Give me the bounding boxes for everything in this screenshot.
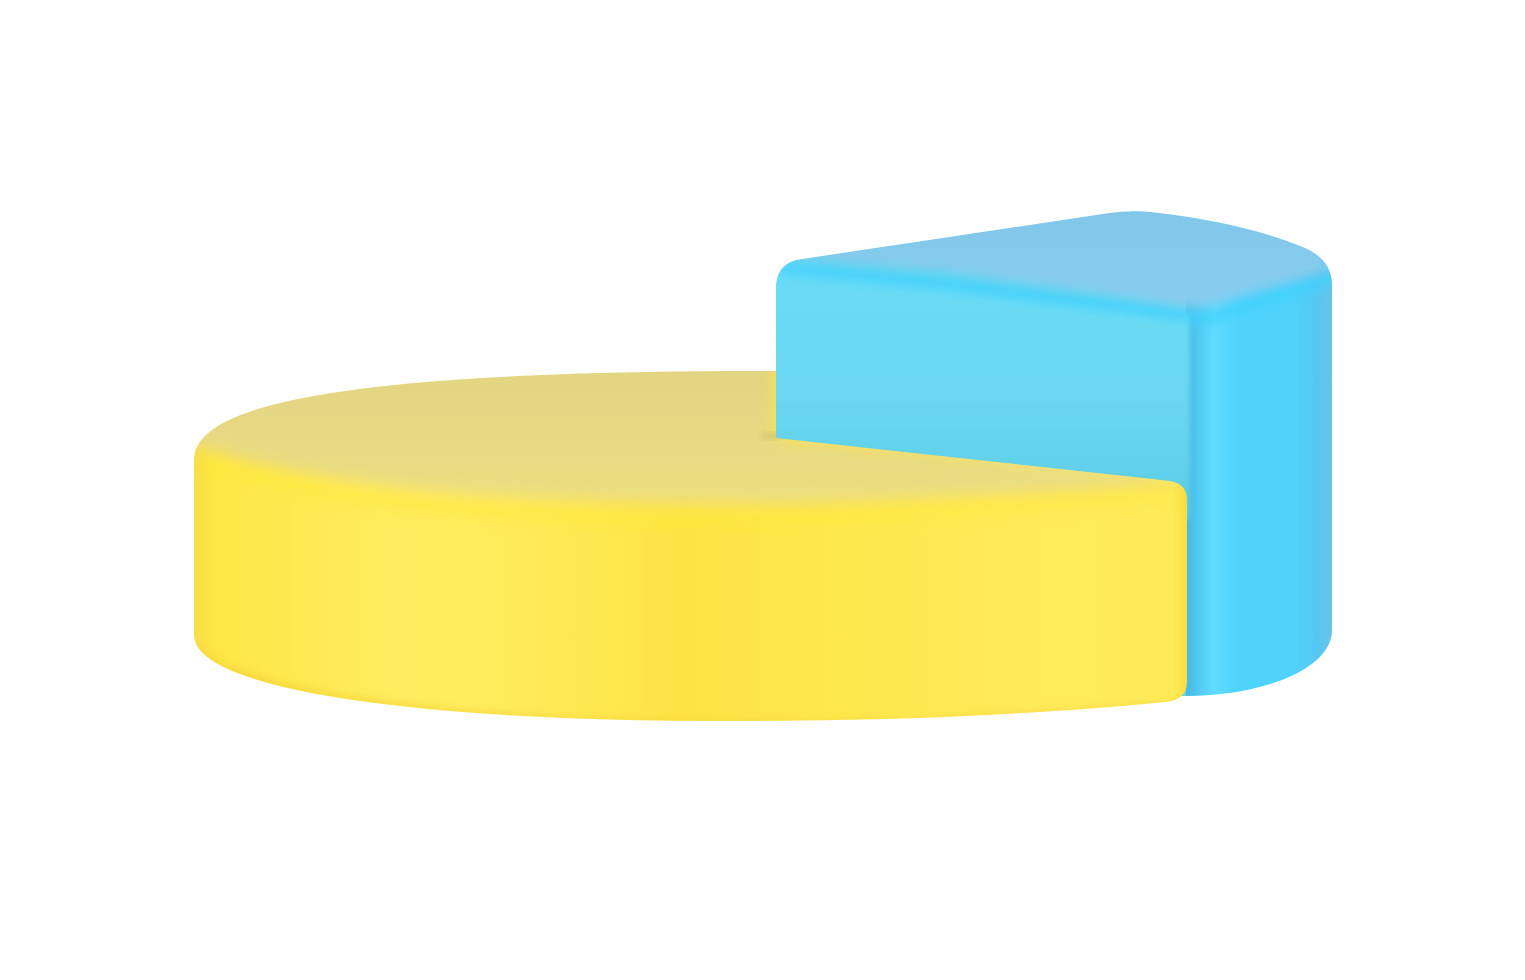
yellow outer side <box>185 360 1195 730</box>
yellow slice <box>194 371 1187 721</box>
yellow top face <box>195 371 1183 512</box>
blue bright rim <box>780 268 1335 318</box>
blue base fill <box>770 200 1190 710</box>
blue slice <box>776 211 1332 696</box>
blue curved outer side <box>1186 216 1332 696</box>
blue flat cut face <box>760 262 1190 520</box>
blue top face <box>792 211 1330 312</box>
contact shadow at blue slice base <box>762 432 780 440</box>
3D pie chart illustration <box>194 211 1332 721</box>
yellow bottom shade <box>194 650 1187 727</box>
yellow saturated rim <box>205 462 1175 516</box>
